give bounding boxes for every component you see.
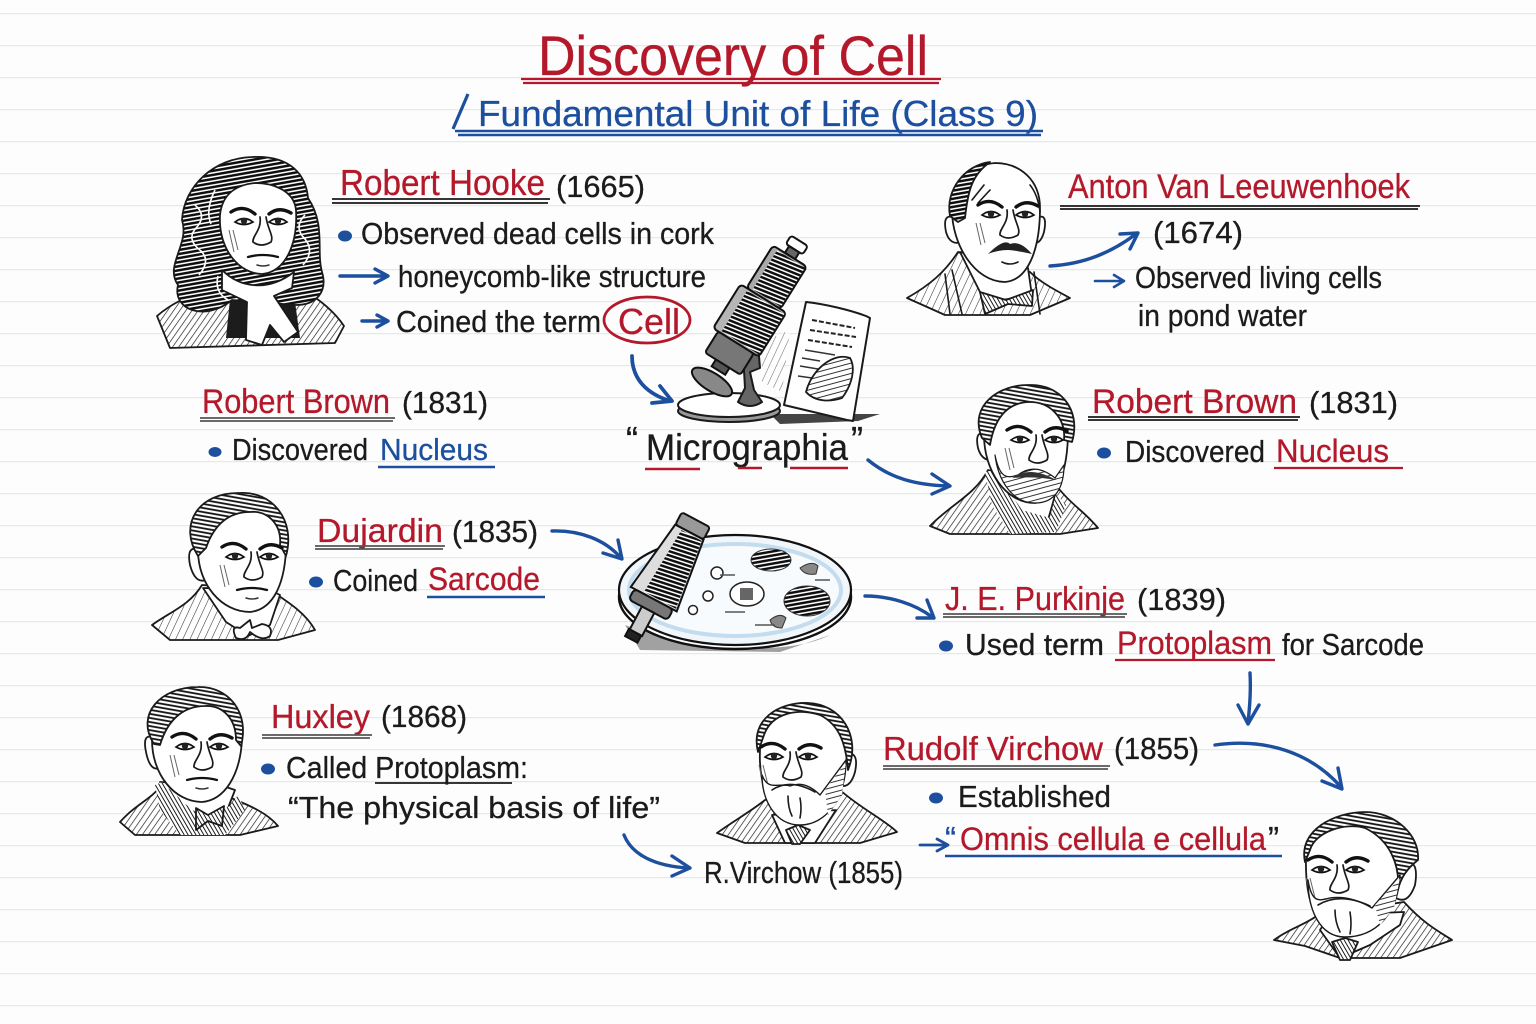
text: Leeuwenhoek <box>1095 215 1382 333</box>
cravat <box>222 270 298 345</box>
title: Discovery of Cell <box>538 24 928 87</box>
beard <box>995 455 1064 503</box>
arrow: dish to Purkinje <box>865 596 934 618</box>
label: Micrographia: “ <box>626 419 638 460</box>
portrait: Huxley <box>120 687 278 835</box>
text: Leeuwenhoek: in pond water <box>1138 298 1307 333</box>
heading and text: Dujardin: (1835) <box>452 514 538 549</box>
bow tie <box>234 620 271 639</box>
beard <box>762 760 846 825</box>
subtitle: Fundamental Unit of Life (Class 9) <box>478 93 1038 134</box>
label: R.Virchow: R.Virchow (1855) <box>704 855 903 890</box>
heading and text: Rudolf Virchow <box>883 730 1282 857</box>
heading and text: Huxley: “The physical basis of life” <box>288 790 660 825</box>
ear <box>838 753 856 786</box>
heading and text: Dujardin <box>309 512 545 598</box>
heading and text: Robert Brown left: (1831) <box>402 385 488 420</box>
text: Hooke observations: Coined the term <box>396 304 601 339</box>
label: Micrographia: ” <box>851 419 863 460</box>
moustache <box>988 242 1032 254</box>
heading and text: Robert Brown left: Nucleus <box>380 432 488 467</box>
heading and text: Huxley: (1868) <box>381 699 467 734</box>
illustration: petri dish with microscope lens <box>609 508 851 652</box>
heading and text: Rudolf Virchow: ” <box>1268 820 1279 857</box>
ears and skull <box>945 217 1045 243</box>
text: Hooke observations <box>338 216 714 343</box>
bow tie <box>980 290 1033 314</box>
heading and text: Rudolf Virchow: (1855) <box>1114 731 1199 766</box>
beard <box>1308 875 1400 937</box>
lens <box>609 508 719 652</box>
book <box>784 302 870 421</box>
heading and text: Robert Brown right <box>1088 383 1403 469</box>
ear <box>1396 862 1416 900</box>
text: Hooke observations: Observed dead cells in cork <box>361 216 714 251</box>
shadow <box>770 414 880 424</box>
heading and text: Robert Brown right: (1831) <box>1309 385 1398 420</box>
base <box>678 400 780 422</box>
heading and text: Purkinje: Protoplasm <box>1117 625 1272 661</box>
arrow: Micrographia to Brown <box>868 460 950 494</box>
heading and text: Huxley <box>261 698 660 825</box>
heading and text: Rudolf Virchow: Omnis cellula e cellula <box>960 821 1266 857</box>
pillar <box>738 340 762 406</box>
heading and text: Huxley: Huxley <box>271 698 370 735</box>
heading and text: Purkinje <box>939 580 1424 662</box>
tube <box>696 226 822 385</box>
portrait: Robert Hooke <box>157 157 344 348</box>
heading and text: Dujardin: Coined <box>333 563 418 598</box>
portrait: Virchow <box>717 703 897 844</box>
heading and text: Robert Brown right: Robert Brown <box>1092 383 1297 421</box>
portrait: Dujardin <box>152 493 315 640</box>
heading and text: Rudolf Virchow: “ <box>945 820 956 857</box>
label: Micrographia: Micrographia <box>646 427 848 468</box>
ear <box>977 433 994 460</box>
face: Hooke <box>220 183 296 274</box>
heading and text: Robert Brown left: Robert Brown <box>202 383 390 421</box>
cells <box>751 549 791 571</box>
arrow: Cell to Micrographia <box>632 356 672 403</box>
arrow: Virchow to portrait <box>1215 743 1342 789</box>
heading and text: Robert Brown right: Nucleus <box>1276 433 1389 469</box>
arrow: Purkinje down to Virchow <box>1238 673 1259 724</box>
heading and text: Purkinje: (1839) <box>1137 582 1226 617</box>
text: Hooke observations: honeycomb-like structure <box>398 259 706 294</box>
heading and text: Robert Brown left: Discovered <box>232 432 368 467</box>
bow tie <box>196 806 224 830</box>
arrow: Leeuwenhoek portrait to date <box>1050 233 1138 266</box>
portrait: Robert Brown <box>930 385 1098 534</box>
heading and text: Huxley: Called Protoplasm: <box>286 750 528 785</box>
illustration: microscope and book <box>678 226 880 424</box>
heading and text: Dujardin: Dujardin <box>317 512 443 549</box>
heading and text: Purkinje: J. E. Purkinje <box>945 580 1125 617</box>
arrow: Huxley to R.Virchow <box>624 835 690 876</box>
heading and text: Dujardin: Sarcode <box>428 561 540 597</box>
text: Hooke observations: Cell <box>618 301 680 342</box>
heading and text: Rudolf Virchow: Established <box>958 779 1111 814</box>
hatch shade <box>762 330 790 392</box>
heading and text: Purkinje: Used term <box>965 627 1104 662</box>
heading: Leeuwenhoek: Anton Van Leeuwenhoek <box>1068 168 1411 206</box>
heading and text: Robert Brown right: Discovered <box>1125 434 1265 469</box>
heading: Robert Hooke: (1665) <box>556 169 645 204</box>
ear <box>189 549 206 581</box>
ear <box>145 737 160 769</box>
heading and text: Purkinje: for Sarcode <box>1282 627 1424 662</box>
arrow: Dujardin to dish <box>552 531 622 559</box>
heading: Robert Hooke: Robert Hooke <box>340 162 545 203</box>
portrait: Leeuwenhoek <box>907 162 1070 315</box>
heading and text: Robert Brown left <box>200 383 495 467</box>
text: Leeuwenhoek: (1674) <box>1153 215 1243 250</box>
text: Leeuwenhoek: Observed living cells <box>1135 260 1382 295</box>
heading and text: Rudolf Virchow: Rudolf Virchow <box>883 730 1103 767</box>
portrait: Virchow lower right <box>1274 812 1452 960</box>
stage <box>688 362 736 402</box>
heading: Robert Hooke <box>332 162 645 204</box>
